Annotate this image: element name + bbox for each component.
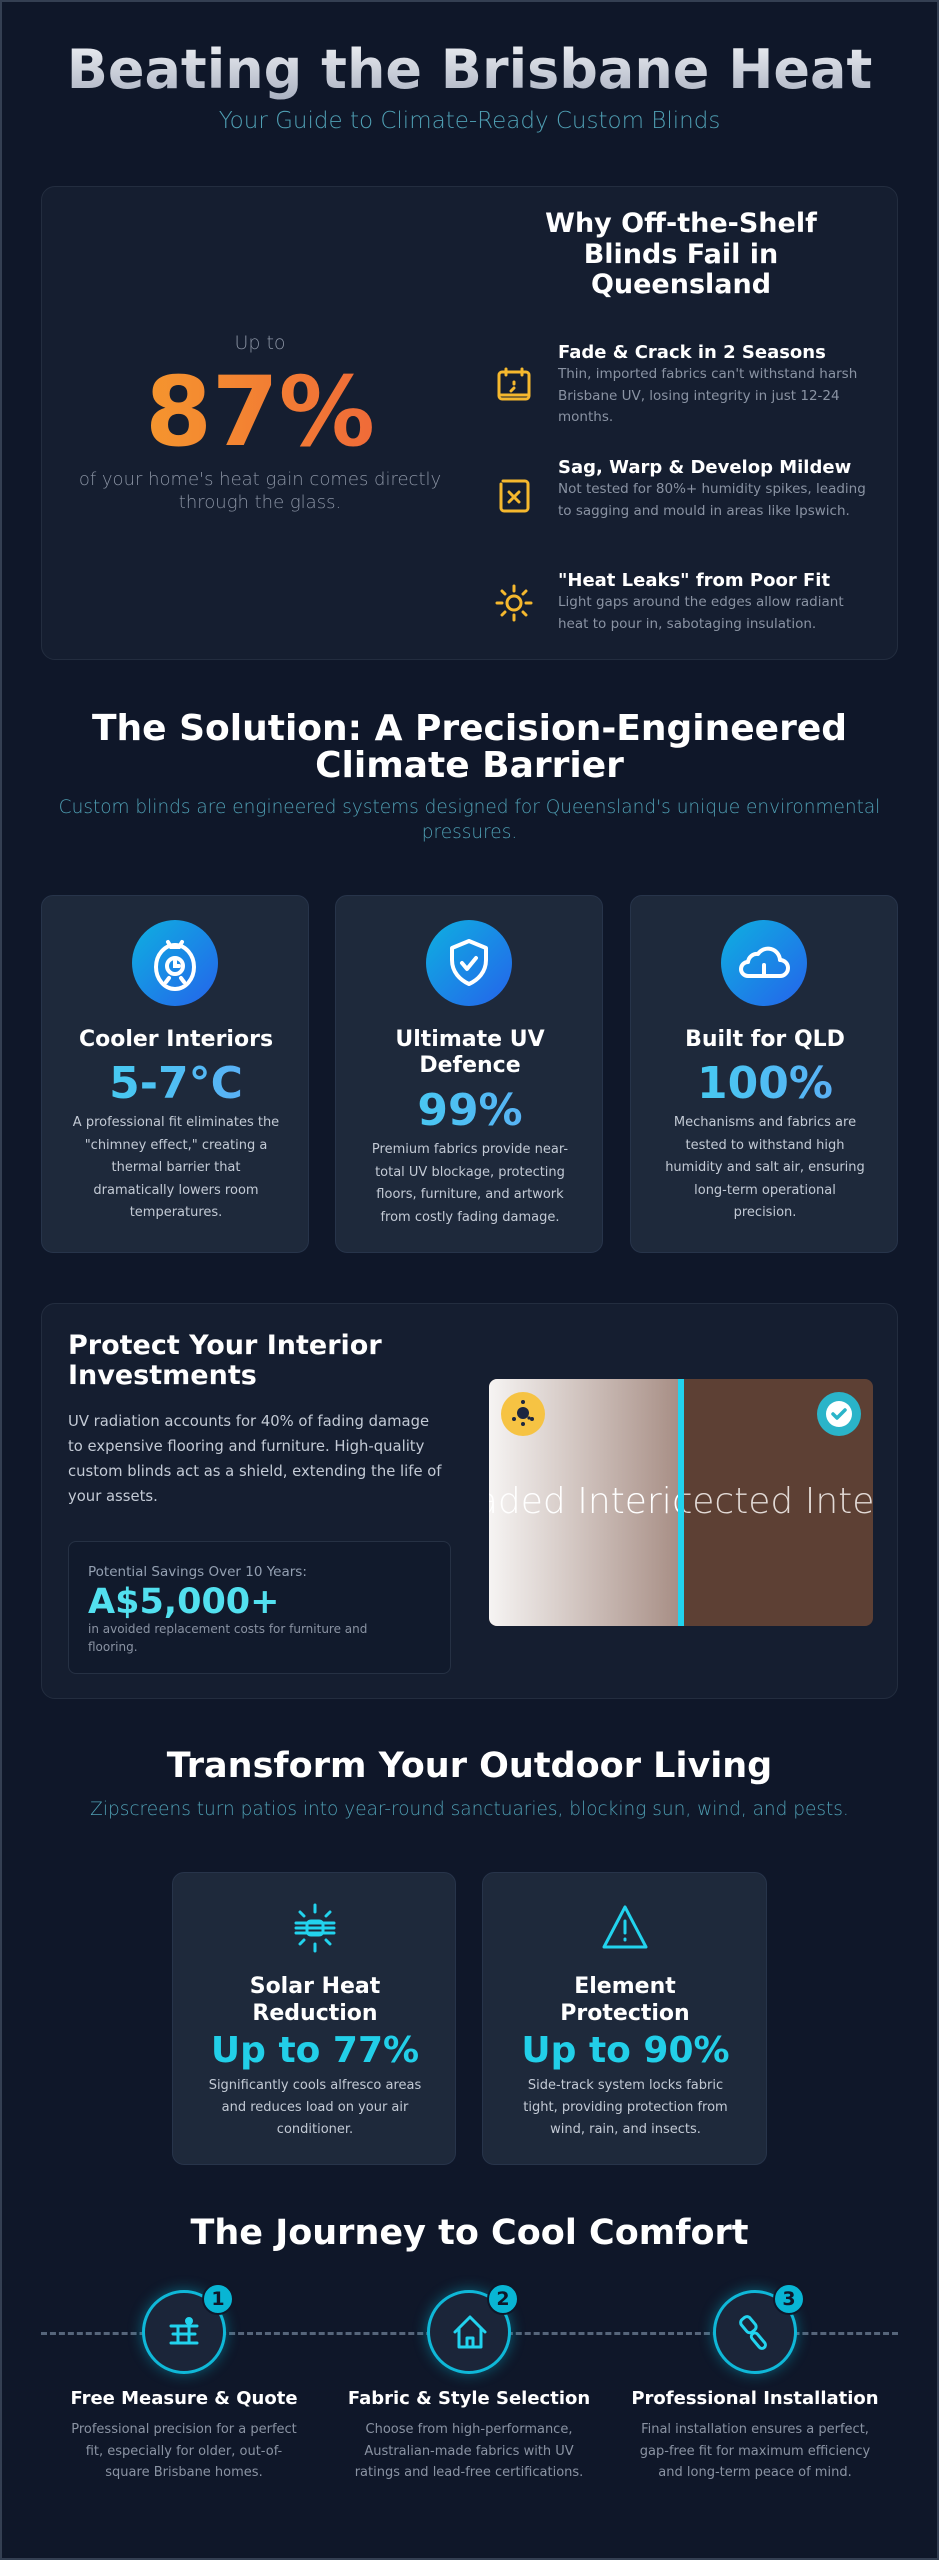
badge 2: 2 (496, 2288, 510, 2310)
big stat 87%: 87% (145, 356, 375, 468)
step title: Fabric & Style Selection (348, 2388, 590, 2409)
icon: cloud (721, 920, 807, 1006)
stat (631, 1059, 899, 1109)
heading: Protect Your Interior Investments (68, 1330, 382, 1391)
paragraph: UV radiation accounts for 40% of fading damage to expensive flooring and furniture. High-quality custom blinds act as a shield, extending the life of your assets. (68, 1413, 442, 1505)
stat: 99% (417, 1085, 523, 1136)
icon: check badge (817, 1392, 861, 1436)
panel: protect interior investments (41, 1303, 898, 1699)
icon: house circle (427, 2290, 511, 2374)
card: element protection (482, 1872, 767, 2165)
item: sag warp mildew: Sag, Warp & Develop Mildew (558, 457, 851, 478)
title: Beating the Brisbane Heat (67, 38, 872, 101)
item: sag warp mildew (558, 457, 866, 519)
outdoor subtitle: Zipscreens turn patios into year-round sanctuaries, blocking sun, wind, and pests. (90, 1799, 849, 1820)
badge 3 (773, 2283, 805, 2315)
stat: Up to 77% (211, 2030, 419, 2071)
step title: Free Measure & Quote (70, 2388, 298, 2409)
description: Side-track system locks fabric tight, providing protection from wind, rain, and insects. (523, 2078, 728, 2137)
solution subtitle: Custom blinds are engineered systems designed for Queensland's unique environmental pressures. (59, 797, 880, 843)
faded half (489, 1379, 678, 1626)
icon: measure circle (142, 2290, 226, 2374)
savings value: A$5,000+ (88, 1582, 279, 1622)
step description: Choose from high-performance, Australian-made fabrics with UV ratings and lead-free certifications. (355, 2422, 583, 2480)
heading: outdoor living: Transform Your Outdoor Living (167, 1746, 772, 1786)
card: UV defence (335, 895, 603, 1253)
badge 1 (202, 2283, 234, 2315)
comparison image (489, 1379, 873, 1626)
savings box (68, 1541, 451, 1674)
icon: shield (426, 920, 512, 1006)
step title: Professional Installation (631, 2388, 879, 2409)
subtitle: Your Guide to Climate-Ready Custom Blinds (219, 108, 720, 134)
icon: sun (496, 584, 532, 622)
card title: Built for QLD (685, 1027, 845, 1052)
description: Premium fabrics provide near-total UV blockage, protecting floors, furniture, and artwork from costly fading damage. (372, 1142, 568, 1224)
card title: Element Protection (560, 1974, 690, 2026)
panel: heat gain and failures (41, 186, 898, 660)
stat label: Up to (234, 332, 286, 354)
step description: Professional precision for a perfect fit, especially for older, out-of-square Brisbane homes. (71, 2422, 297, 2480)
heading: the solution: The Solution: A Precision-Engineered Climate Barrier (92, 708, 847, 786)
step 2: fabric selection (348, 2282, 590, 2480)
card title: Ultimate UV Defence (395, 1027, 545, 1078)
icon: thermometer clock (132, 920, 218, 1006)
icon: calendar (498, 368, 530, 400)
step 1: free measure (70, 2282, 298, 2480)
icon: sun blind (294, 1904, 336, 1952)
icon: sun badge (501, 1392, 545, 1436)
icon: x box (500, 480, 530, 512)
step description: Final installation ensures a perfect, gap-free fit for maximum efficiency and long-term peace of mind. (640, 2422, 870, 2480)
badge 1: 1 (211, 2288, 225, 2310)
description: A professional fit eliminates the "chimney effect," creating a thermal barrier that dramatically lowers room temperatures. (73, 1115, 279, 1220)
description: Significantly cools alfresco areas and reduces load on your air conditioner. (209, 2078, 421, 2137)
badge 3: 3 (782, 2288, 796, 2310)
item: fade & crack: Thin, imported fabrics can't withstand harsh Brisbane UV, losing integrity in just 12-24 months. (558, 366, 857, 425)
item: heat leaks: Light gaps around the edges allow radiant heat to pour in, sabotaging insulation. (558, 594, 844, 632)
savings note: in avoided replacement costs for furniture and flooring. (88, 1622, 367, 1654)
item: sag warp mildew: Not tested for 80%+ humidity spikes, leading to sagging and mould in areas like Ipswich. (558, 481, 866, 519)
stat description: of your home's heat gain comes directly through the glass. (79, 469, 441, 513)
savings label: Potential Savings Over 10 Years: (88, 1564, 307, 1580)
card title: Solar Heat Reduction (250, 1974, 380, 2026)
icon: tool circle (713, 2290, 797, 2374)
item: fade & crack: Fade & Crack in 2 Seasons (558, 342, 826, 363)
stat: 5-7°C (109, 1058, 243, 1109)
item: heat leaks (558, 570, 844, 632)
heading: journey: The Journey to Cool Comfort (190, 2213, 748, 2253)
heading: why off-the-shelf fails: Why Off-the-Shelf Blinds Fail in Queensland (545, 208, 817, 300)
stat: 100% (697, 1058, 833, 1109)
card: cooler interiors (41, 895, 309, 1253)
icon: warning triangle (602, 1905, 648, 1948)
description: Mechanisms and fabrics are tested to withstand high humidity and salt air, ensuring long-term operational precision. (665, 1115, 865, 1220)
card: solar heat reduction (172, 1872, 456, 2165)
badge 2 (487, 2283, 519, 2315)
divider (678, 1379, 684, 1626)
item: heat leaks: "Heat Leaks" from Poor Fit (558, 570, 830, 591)
big stat 87% (61, 359, 459, 465)
stat (42, 1059, 310, 1109)
card: built for QLD (630, 895, 898, 1253)
stat: Up to 90% (521, 2030, 730, 2071)
stat (336, 1086, 604, 1136)
step 3: installation (631, 2282, 879, 2480)
card title: Cooler Interiors (79, 1027, 273, 1052)
